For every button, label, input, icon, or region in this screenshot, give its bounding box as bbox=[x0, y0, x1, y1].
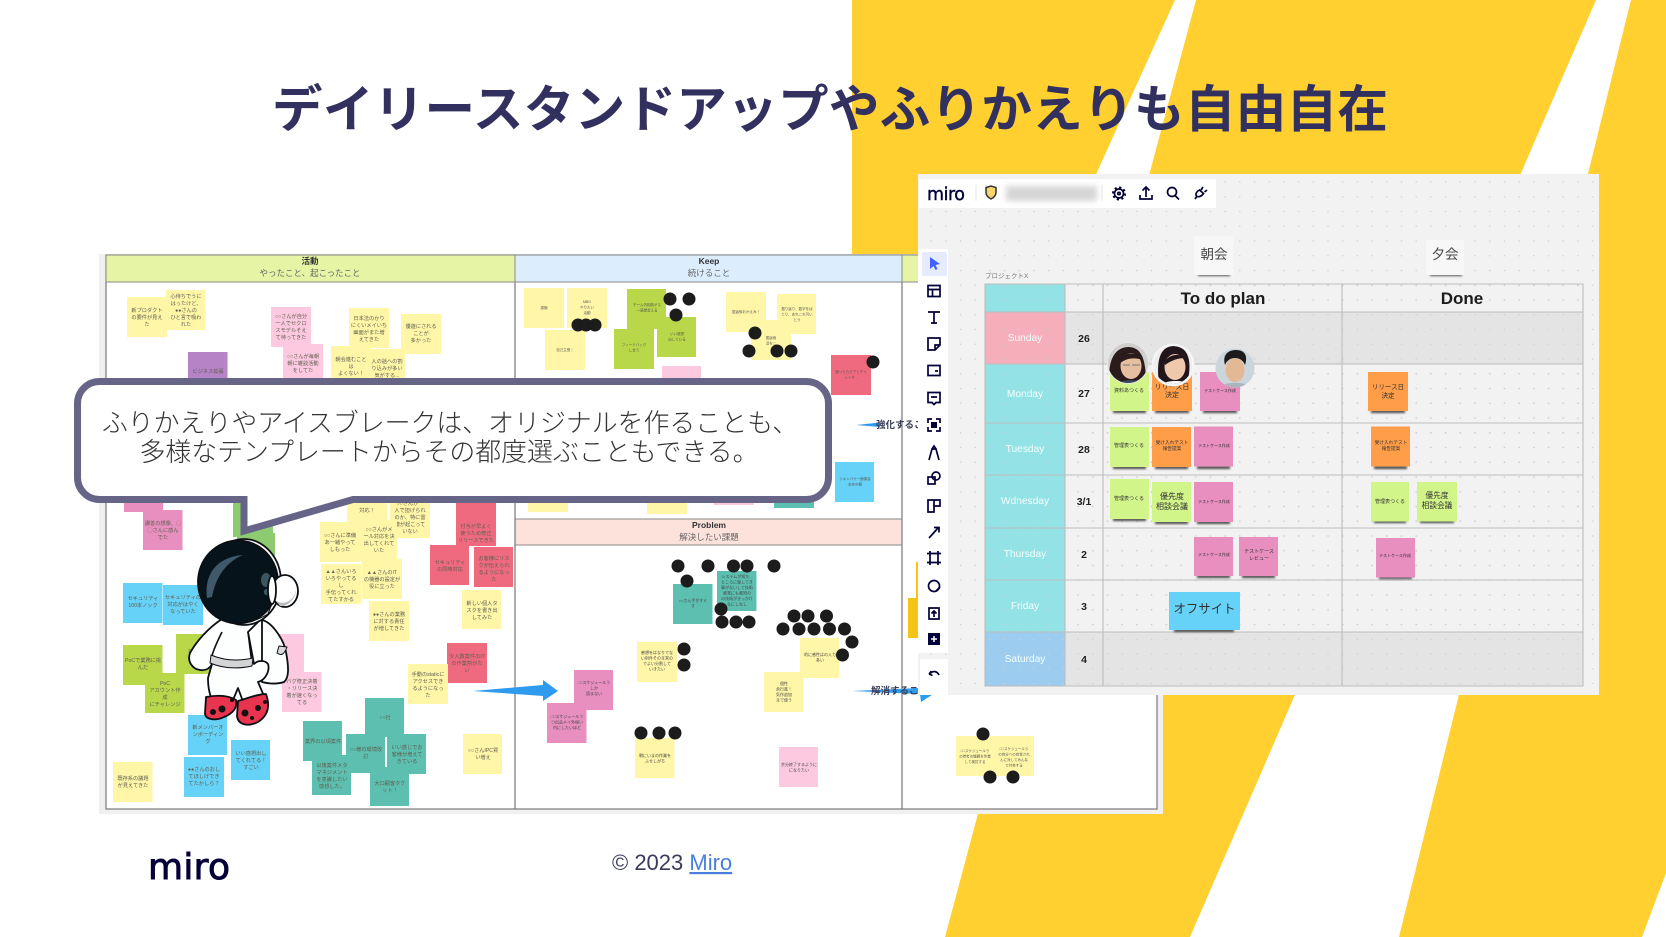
sticky notes: activity column, lower: が増してきた bbox=[374, 624, 404, 632]
sticky notes: activity column, lower: お客様にリス bbox=[478, 554, 510, 562]
sticky notes: activity column, lower: るようになっ bbox=[412, 685, 444, 692]
sticky notes: activity column, upper: て待ってきた bbox=[276, 333, 306, 341]
table day labels: Tuesday bbox=[1006, 444, 1045, 455]
sticky notes: activity column, lower: 訂 bbox=[363, 753, 369, 760]
table date numbers bbox=[1077, 333, 1091, 666]
sticky notes: activity column, upper: ビジネス拡張 bbox=[192, 367, 224, 375]
sticky notes: to do plan: テストケース作成 bbox=[1198, 442, 1230, 448]
sticky notes: activity column, lower: 感想した。 bbox=[319, 782, 345, 790]
panel: retrospective board screenshot bbox=[99, 254, 1163, 814]
footer logo: miro bbox=[148, 847, 230, 888]
sticky notes: activity column, lower: セキュリティ bbox=[128, 595, 158, 602]
table date numbers: 3 bbox=[1081, 601, 1087, 613]
sticky notes: activity column, lower: ●●さんのおし bbox=[188, 766, 220, 773]
sticky notes: activity column, lower: マネジメント bbox=[316, 769, 348, 776]
sticky notes: activity column, lower: 使うため修正 bbox=[460, 529, 492, 537]
icon: pen bbox=[929, 446, 939, 460]
table: weekly plan bbox=[985, 284, 1583, 686]
board column headers: 解決したい課題 bbox=[679, 532, 739, 542]
table date numbers: 28 bbox=[1078, 444, 1090, 456]
sticky notes: problem column: なにしなし bbox=[727, 600, 747, 606]
table day labels: Saturday bbox=[1005, 654, 1046, 665]
sticky notes: activity column, lower: アクセスでき bbox=[413, 678, 443, 685]
sticky notes: third column: □□スケジュールう bbox=[1000, 746, 1028, 751]
table date numbers: 27 bbox=[1078, 388, 1090, 400]
sticky notes: activity column, upper: た bbox=[144, 321, 150, 328]
sticky notes: problem column: 内にしたいほど bbox=[553, 724, 581, 730]
sticky notes: activity column, upper: スモデルそえ bbox=[275, 326, 307, 334]
icon: plug bbox=[1195, 187, 1207, 199]
sticky notes: activity column, lower: てたすかる bbox=[328, 596, 354, 603]
sticky notes: keep column: し合う bbox=[629, 348, 639, 352]
sticky notes: third column: の参考の議題を作業 bbox=[959, 754, 991, 758]
sticky notes: activity column, upper: の要件が見え bbox=[131, 313, 163, 321]
sticky notes: to do plan: テストケース作成 bbox=[1204, 387, 1236, 393]
sticky notes: problem column: まで使う bbox=[776, 696, 792, 702]
sticky notes: activity column, lower: 大口顧客タケ bbox=[374, 779, 406, 787]
icon: settings bbox=[1113, 188, 1125, 200]
background: yellow diagonal bands bbox=[852, 0, 1666, 937]
icon: frame bbox=[927, 551, 941, 565]
board name blurred bbox=[1006, 186, 1097, 201]
icon: comment bbox=[928, 392, 940, 404]
sticky notes: problem column: 多い bbox=[816, 656, 824, 662]
sticky notes: activity column, upper: ひと言で吸わ bbox=[171, 314, 201, 321]
sticky notes: problem column: 余分終了するように bbox=[781, 761, 817, 767]
sticky notes: keep column: 出している bbox=[668, 336, 686, 342]
sticky notes: third column: □□スケジュールう bbox=[961, 748, 989, 753]
icon: shield bbox=[986, 186, 996, 199]
sticky notes: activity column, lower: ▲▲さんいろ bbox=[325, 568, 357, 575]
sticky notes: activity column, upper: 朝会進むこと bbox=[335, 355, 367, 363]
sticky notes: activity column, lower: ◯さんに感ん bbox=[147, 526, 179, 534]
board column headers: 活動 bbox=[301, 256, 319, 266]
sticky notes: activity column, lower: いた bbox=[374, 547, 384, 554]
sticky notes: keep column: 活をこ bbox=[766, 340, 776, 346]
table day labels: Sunday bbox=[1008, 333, 1043, 344]
sticky notes: keep column: とう bbox=[794, 317, 800, 322]
sticky notes: problem column: でよい分割して bbox=[643, 660, 671, 666]
sticky notes: activity column, lower: 既存系の議題 bbox=[117, 774, 149, 782]
sticky notes: activity column, lower: ○○さんがメ bbox=[365, 525, 393, 533]
avatar: woman smiling bbox=[1150, 344, 1196, 386]
sticky notes: activity column, lower: 激が起こって bbox=[395, 520, 425, 528]
sticky notes: done: リリース日 bbox=[1372, 383, 1404, 391]
sticky notes: activity column, lower: 客様が増えて bbox=[392, 750, 422, 758]
sticky notes: activity column, upper: 優遊にされる bbox=[405, 322, 437, 330]
sticky notes: activity column, lower: の機器の設定が bbox=[364, 575, 401, 583]
sticky notes: problem column: 朝にいまの作業を bbox=[639, 752, 671, 758]
dot votes: keep column bbox=[572, 292, 880, 368]
sticky notes: activity column, lower: 新しい個人タ bbox=[466, 599, 498, 607]
arrow: keep to strengthen: 強化すること bbox=[876, 419, 933, 431]
sticky notes: to do plan: テストケース bbox=[1244, 548, 1274, 555]
sticky notes: activity column, lower: PoCで業務に挑 bbox=[125, 656, 162, 664]
sticky notes: activity column, lower: グ bbox=[205, 737, 211, 745]
sticky notes: activity column, lower: セキュリティ bbox=[435, 559, 465, 566]
sticky notes: activity column, upper bbox=[127, 290, 441, 382]
callout text: 多様なテンプレートからその都度選ぶこともできる。 bbox=[139, 438, 759, 467]
sticky notes: activity column, lower: 出してくれて bbox=[364, 539, 394, 547]
sticky notes: to do plan: オフサイト bbox=[1174, 602, 1235, 616]
sticky notes: activity column, lower: あ一緒やって bbox=[325, 538, 355, 546]
sticky notes: to do plan: リリース日 bbox=[1155, 383, 1189, 391]
sticky notes: activity column, lower: クが伝えられ bbox=[478, 561, 510, 569]
arrow: keep to strengthen bbox=[856, 419, 933, 431]
sticky notes: activity column, lower: し bbox=[338, 582, 344, 589]
sticky notes: problem column: いきたい bbox=[649, 666, 665, 672]
sticky notes: activity column, lower: いい感想出し bbox=[235, 749, 267, 757]
sticky notes: activity column, lower: なっていた bbox=[170, 608, 196, 615]
sticky notes: to do plan: 報告提案 bbox=[1163, 445, 1182, 452]
sticky notes: activity column, upper: ことが bbox=[413, 329, 430, 337]
sticky notes: to do plan: テストケース作成 bbox=[1198, 551, 1230, 557]
callout: speech bubble bbox=[78, 382, 828, 531]
sticky notes: activity column, lower: んだ bbox=[138, 664, 148, 671]
sticky notes: to do plan bbox=[1110, 372, 1278, 630]
sticky notes: to do plan: レビュー bbox=[1249, 555, 1269, 562]
sticky notes: problem column bbox=[547, 571, 839, 787]
sticky notes: activity column, lower: すごい bbox=[243, 763, 259, 771]
sticky notes: activity column, lower: た bbox=[425, 692, 431, 699]
sticky notes: activity column, lower: 以後案件メタ bbox=[316, 761, 348, 769]
sticky notes: to do plan: 決定 bbox=[1165, 390, 1179, 399]
icon: cursor bbox=[930, 257, 940, 270]
mascot: astronaut bbox=[189, 539, 298, 725]
sticky notes: activity column, lower: 対応！ bbox=[359, 506, 375, 514]
sticky notes: activity column, upper: ○○さんが毎朝 bbox=[287, 352, 319, 360]
title: デイリースタンドアップやふりかえりも自由自在 bbox=[272, 81, 1388, 138]
sticky notes: keep column: 振返後おかえみ！ bbox=[732, 309, 760, 314]
sticky notes: problem column: ○○さん手がすぐ bbox=[679, 597, 707, 603]
sticky notes: activity column, lower: セキュリティの bbox=[165, 594, 201, 601]
sticky notes: activity column, lower: の作業割がた bbox=[451, 659, 483, 667]
board column headers: やったこと、起こったこと bbox=[259, 268, 361, 278]
table day labels bbox=[1001, 333, 1050, 665]
sticky notes: activity column, lower: ○○社 bbox=[379, 713, 392, 721]
table date numbers: 26 bbox=[1078, 333, 1090, 345]
avatar: woman with glasses bbox=[1106, 342, 1150, 384]
sticky notes: activity column, lower: いない bbox=[402, 528, 418, 535]
sticky notes: activity column, lower: アカウント作 bbox=[149, 686, 181, 694]
sticky notes: problem column: 読まない bbox=[586, 690, 602, 696]
sticky notes: activity column, lower: ール対応を決 bbox=[363, 532, 395, 540]
icon: add bbox=[928, 633, 940, 645]
sticky notes: third column: の自分への自覚され bbox=[998, 752, 1030, 756]
sticky notes: activity column, lower: るようになっ bbox=[478, 569, 510, 576]
sticky notes: activity column, upper: 一人でセクロ bbox=[275, 320, 307, 327]
sticky notes: keep column: チーム内相談ゲス bbox=[633, 302, 661, 307]
sticky notes: activity column, lower: ●●さんの業務 bbox=[373, 610, 406, 618]
sticky notes: activity column, lower: てほしげでき bbox=[188, 772, 220, 780]
sticky notes: activity column, lower: ット！ bbox=[382, 787, 398, 794]
sticky notes: activity column, lower: ンボーディン bbox=[193, 730, 223, 738]
arrow: activity to problem bbox=[473, 680, 558, 701]
sticky notes: activity column, upper: ○○さんが自分 bbox=[275, 312, 308, 320]
column tag: evening meeting: 夕会 bbox=[1432, 247, 1459, 262]
sticky notes: activity column, lower: PoCで bbox=[188, 648, 204, 655]
sticky notes: activity column, upper: にくいメイいち bbox=[351, 322, 387, 329]
sticky notes: done: 決定 bbox=[1382, 390, 1395, 400]
sticky notes: done: 管理表つくる bbox=[1375, 498, 1405, 505]
sticky notes: activity column, upper: はったけど、 bbox=[171, 299, 201, 307]
board column headers: 続けること bbox=[688, 268, 730, 278]
sticky notes: activity column, lower: 役に立った bbox=[369, 582, 395, 590]
icon: templates bbox=[928, 286, 940, 296]
sticky notes: activity column, lower: してみた bbox=[472, 614, 492, 621]
sticky notes: activity column, lower: い増え bbox=[475, 753, 491, 761]
sticky notes: keep column bbox=[524, 288, 874, 514]
board column headers bbox=[106, 255, 1157, 545]
column tag: evening meeting bbox=[1426, 240, 1464, 276]
sticky notes: activity column, upper: をしてた bbox=[293, 367, 313, 374]
sticky notes: keep column: やりたい bbox=[580, 304, 594, 310]
sticky notes: activity column, lower: 手動のstaticに bbox=[412, 670, 444, 678]
icon: undo bbox=[929, 671, 939, 676]
sticky notes: activity column, lower: 成 bbox=[162, 693, 168, 701]
sticky notes: done: テストケース作成 bbox=[1379, 552, 1411, 558]
sticky notes: activity column, lower: を意識したい bbox=[316, 775, 348, 783]
table day labels: Friday bbox=[1011, 601, 1040, 612]
sticky notes: activity column, lower: てる bbox=[297, 699, 307, 706]
sticky notes: keep column: いい感想 bbox=[670, 331, 684, 336]
sticky notes: done: 報告提案 bbox=[1382, 445, 1401, 452]
column tag: morning meeting bbox=[1194, 236, 1233, 276]
sticky notes: activity column, lower: の同時対応 bbox=[437, 565, 464, 573]
icon: book bbox=[928, 500, 940, 512]
sticky notes: problem column: □□スケジュールう bbox=[551, 713, 583, 719]
sticky notes: activity column, lower: が見えてきた bbox=[118, 781, 148, 789]
sticky notes: activity column, lower: にチャレンジ bbox=[149, 701, 181, 708]
sticky notes: activity column, lower: しもった bbox=[330, 546, 350, 553]
sticky notes: third column: で共有する bbox=[1005, 762, 1023, 768]
sticky notes: activity column, lower: に対する責任 bbox=[373, 617, 405, 625]
sticky notes: activity column, lower: ▲▲さんのIT bbox=[367, 569, 398, 576]
sticky notes: problem column: システムが知か... bbox=[721, 573, 753, 579]
sticky notes: to do plan: 資料あつくる bbox=[1114, 387, 1144, 394]
sticky notes: problem column: 感想をはなりでな bbox=[641, 649, 673, 655]
sticky shadows bbox=[1113, 410, 1454, 632]
sticky notes: activity column, lower: スクを書き出 bbox=[466, 606, 498, 614]
footer copyright: © 2023 Miro bbox=[612, 850, 732, 875]
sticky notes: activity column, lower: リリースできた bbox=[458, 537, 494, 544]
sticky notes: activity column, upper: 画面がまた増 bbox=[353, 328, 385, 336]
icon: card bbox=[928, 366, 940, 376]
sticky notes: activity column, lower: ○○さんが一 bbox=[396, 499, 424, 507]
sticky notes: problem column: □□スケジュールう bbox=[578, 679, 610, 685]
sticky notes: keep column: 自己主張！ bbox=[556, 347, 574, 352]
sticky notes: to do plan: 優先度 bbox=[1160, 491, 1184, 501]
sticky notes: activity column, lower: てたかしら？ bbox=[188, 780, 220, 787]
sticky notes: activity column, lower: 少人数案件のIT bbox=[449, 652, 486, 660]
sticky notes: keep column: 感謝 bbox=[540, 305, 548, 310]
toolbar logo: miro bbox=[927, 185, 965, 205]
sticky notes: keep column: とり、あれこれ可い bbox=[781, 312, 813, 316]
sticky notes: done: 相談会議 bbox=[1422, 500, 1453, 510]
sticky notes: activity column, lower: てくれてる！ bbox=[236, 757, 266, 764]
sticky notes: problem column: しか bbox=[590, 684, 598, 690]
project label: プロジェクトX bbox=[985, 272, 1029, 280]
sticky notes: activity column, lower: 手伝ってくれ bbox=[326, 588, 357, 596]
sticky notes: activity column, upper: 新プロダクト bbox=[131, 306, 163, 314]
sticky notes: activity column, lower: 人で担げられ bbox=[394, 506, 426, 514]
table date numbers: 4 bbox=[1081, 654, 1087, 666]
sticky notes: done: 受け入れテスト bbox=[1375, 439, 1407, 446]
sticky notes: activity column, lower bbox=[113, 488, 513, 806]
icon: search bbox=[1168, 188, 1179, 200]
icon: frame focus bbox=[928, 419, 940, 431]
column tag: morning meeting: 朝会 bbox=[1200, 247, 1228, 262]
sticky notes: activity column, lower: 対応がはやく bbox=[167, 600, 199, 608]
sticky notes: problem column: ところに使してき bbox=[721, 578, 753, 584]
sticky notes: activity column, lower: いい感じでお bbox=[391, 743, 423, 751]
avatar: man bbox=[1215, 348, 1255, 388]
callout text: ふりかえりやアイスブレークは、オリジナルを作ることも、 bbox=[102, 409, 798, 438]
sticky notes: problem column: 感覚にも感知の bbox=[723, 590, 751, 596]
sticky notes: keep column: フィードバック bbox=[622, 342, 647, 347]
sticky notes: activity column, upper: 人の話への割 bbox=[371, 357, 403, 365]
sticky notes: problem column: つ出品メイ外程い bbox=[551, 718, 583, 724]
table date numbers: 3/1 bbox=[1077, 496, 1091, 508]
icon: emoji bbox=[928, 580, 940, 592]
icon: arrow line bbox=[929, 528, 939, 538]
panel: daily stand-up board screenshot bbox=[918, 174, 1599, 695]
dot votes: third column bbox=[976, 728, 1020, 784]
sticky notes: to do plan: 相談会議 bbox=[1156, 501, 1188, 511]
arrow: problem to solve: 解消すること bbox=[871, 685, 928, 697]
sticky notes: third column: んに対してみんな bbox=[1000, 757, 1028, 762]
sticky notes: done: 優先度 bbox=[1425, 490, 1449, 500]
sticky notes: problem column: 気作追加 bbox=[776, 691, 792, 697]
sticky notes: problem column: す bbox=[691, 604, 695, 608]
sticky notes: activity column, upper: えてきた bbox=[359, 336, 379, 343]
dot votes: problem column bbox=[634, 560, 858, 740]
sticky notes: problem column: 個性 bbox=[780, 680, 788, 686]
arrow: problem to solve bbox=[852, 680, 935, 702]
sticky notes: third column bbox=[908, 562, 1034, 776]
icon: upload frame bbox=[929, 608, 939, 619]
sticky notes: to do plan: テストケース作成 bbox=[1198, 498, 1230, 504]
icon: sticky note bbox=[928, 338, 940, 350]
column dividers bbox=[515, 282, 902, 809]
sticky notes: activity column, upper: 日本法のかり bbox=[353, 314, 385, 322]
icon: upload bbox=[1140, 187, 1152, 199]
sticky notes: third column: して検討する bbox=[965, 759, 985, 764]
table column headings: To do plan bbox=[1181, 289, 1265, 308]
board column headers: Keep bbox=[699, 256, 719, 266]
sticky notes: activity column, lower: きている bbox=[397, 758, 417, 765]
sticky notes: activity column, lower: 付与が早よく bbox=[460, 522, 492, 530]
sticky notes: activity column, lower: バグ修正決着 bbox=[286, 677, 318, 685]
left toolbar bbox=[918, 249, 948, 695]
table day labels: Thursday bbox=[1004, 549, 1047, 560]
sticky notes: problem column: になりたい bbox=[789, 766, 809, 772]
icon: shapes bbox=[928, 472, 940, 484]
sticky notes: activity column, lower: 着が速くなっ bbox=[286, 691, 318, 699]
sticky notes: activity column, lower: ○○さんに準備 bbox=[324, 531, 356, 539]
sticky notes: keep column: ットす... bbox=[844, 374, 858, 380]
sticky notes: activity column, upper: 多かった bbox=[411, 336, 431, 344]
sticky notes: to do plan: 受け入れテスト bbox=[1156, 439, 1188, 446]
sticky notes: activity column, lower: 新メンバーオ bbox=[192, 723, 224, 731]
sticky notes: activity column, upper: は bbox=[348, 363, 354, 370]
sticky notes: to do plan: 管理表つくる bbox=[1114, 495, 1144, 502]
sticky notes: activity column, lower: 100本ノック bbox=[128, 601, 158, 609]
sticky notes: keep column: あめの軽 bbox=[848, 482, 862, 486]
sticky notes: keep column: 活動 bbox=[584, 310, 591, 315]
sticky notes: activity column, upper: ●●さんの bbox=[175, 307, 197, 314]
sticky notes: activity column, lower: た bbox=[491, 576, 497, 583]
sticky notes: activity column, lower: ○○さんIPC買 bbox=[468, 747, 498, 754]
sticky notes: activity column, lower: PoC bbox=[160, 681, 170, 687]
sticky notes: keep column: 振返後 bbox=[766, 335, 777, 340]
sticky notes: problem column: い別件そのま営の bbox=[641, 654, 673, 660]
sticky notes: to do plan: 管理表つくる bbox=[1114, 442, 1144, 449]
table day labels: Monday bbox=[1007, 389, 1044, 400]
sticky notes: keep column: 一感想会える bbox=[637, 308, 657, 312]
sticky notes: problem column: 的に感性はの人カ bbox=[804, 651, 836, 657]
sticky notes: activity column, lower: ・リリース決 bbox=[287, 684, 318, 692]
sticky notes: keep column: 困ったらピアとチャ bbox=[835, 369, 867, 374]
table: weekly plan: Done bbox=[1441, 289, 1483, 308]
sticky notes: activity column, lower: 業界の以頃案件 bbox=[305, 737, 341, 745]
sticky notes: activity column, lower: い bbox=[464, 667, 470, 674]
sticky notes: problem column: 余行進！ bbox=[776, 686, 792, 692]
sticky notes: activity column, upper: れた bbox=[181, 321, 191, 328]
sticky notes: activity column, upper: よくない！ bbox=[338, 370, 364, 377]
sticky notes: keep column: ジキンパナー面接会 bbox=[839, 476, 871, 481]
icon: text bbox=[928, 312, 940, 323]
sticky notes: keep column: 振り返り、数字をば bbox=[781, 306, 813, 311]
sticky notes: activity column, upper: 朝に雑談活動 bbox=[287, 359, 319, 367]
sticky notes: activity column, lower: ○○様の環境改 bbox=[350, 745, 383, 753]
sticky notes: done bbox=[1368, 372, 1457, 578]
top toolbar bbox=[919, 179, 1216, 208]
sticky notes: activity column, upper: 心待ちでうに bbox=[170, 292, 202, 300]
sticky notes: activity column, upper: 気がする... bbox=[374, 371, 400, 379]
table day labels: Wdnesday bbox=[1001, 496, 1050, 507]
sticky notes: problem column: 事がないして技術 bbox=[721, 584, 753, 590]
sticky notes: keep column: MBO bbox=[583, 300, 591, 304]
sticky notes: activity column, lower: のか、特に雷 bbox=[394, 513, 426, 521]
sticky notes: problem column: の技術がきっかけ bbox=[721, 595, 753, 601]
sticky notes: activity column, lower: でた bbox=[158, 534, 168, 541]
table date numbers: 2 bbox=[1081, 549, 1087, 561]
sticky notes: activity column, lower: いろやってる bbox=[326, 574, 356, 582]
board column headers: Problem bbox=[692, 520, 726, 530]
sticky notes: problem column: ふせしがち bbox=[645, 758, 665, 764]
sticky notes: activity column, lower: 讃善の想像、◯ bbox=[145, 519, 181, 527]
sticky notes: activity column, upper: り込みが多い bbox=[371, 364, 403, 372]
